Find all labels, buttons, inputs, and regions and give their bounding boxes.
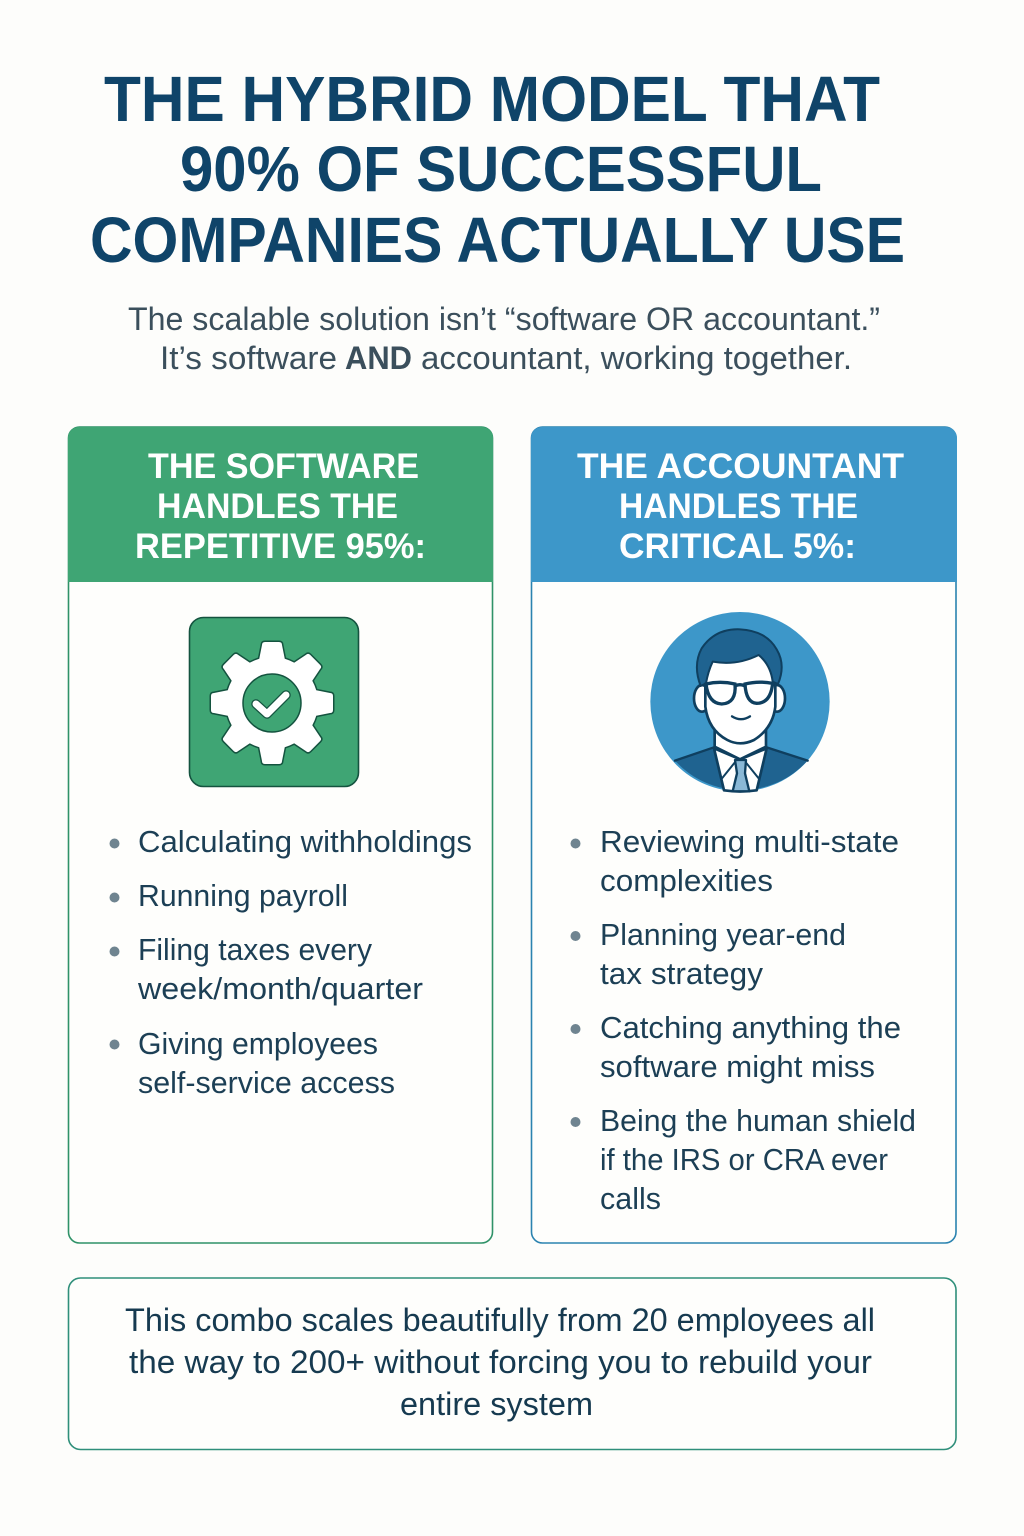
accountant bullet list: Being the human shield	[600, 1103, 916, 1138]
accountant bullet list: complexities	[600, 863, 773, 898]
accountant bullet list: tax strategy	[600, 956, 763, 991]
accountant header: HANDLES THE	[619, 487, 858, 526]
icon: gear with check mark	[190, 618, 358, 786]
title: COMPANIES ACTUALLY USE	[90, 204, 905, 276]
hair	[697, 629, 782, 686]
accountant bullet list: calls	[600, 1181, 661, 1216]
panel: software	[68, 427, 493, 1243]
software bullet list: Running payroll	[138, 878, 348, 913]
panel: accountant	[531, 427, 957, 1243]
software bullet list: Giving employees	[138, 1026, 378, 1061]
suit	[675, 747, 808, 790]
accountant bullet list: software might miss	[600, 1049, 875, 1084]
software header: REPETITIVE 95%:	[135, 527, 426, 566]
title: 90% OF SUCCESSFUL	[180, 133, 822, 205]
callout: scaling note: This combo scales beautifully from 20 employees all	[125, 1302, 875, 1338]
accountant bullet list	[570, 824, 916, 1216]
subtitle	[128, 301, 880, 376]
callout: scaling note	[68, 1278, 956, 1450]
glasses	[706, 682, 773, 704]
tie	[733, 760, 749, 791]
accountant bullet list: Planning year-end	[600, 917, 846, 952]
software bullet list: Filing taxes every	[138, 932, 372, 967]
accountant header: THE ACCOUNTANT	[577, 447, 904, 486]
callout: scaling note: entire system	[400, 1386, 593, 1422]
software header: THE SOFTWARE	[148, 447, 419, 486]
neck	[715, 728, 766, 759]
software bullet list: Calculating withholdings	[138, 824, 472, 859]
accountant bullet list: if the IRS or CRA ever	[600, 1142, 888, 1177]
subtitle: accountant, working together.	[421, 340, 852, 376]
suit shoulders	[675, 747, 808, 761]
software header	[68, 427, 493, 582]
accountant bullet list: Catching anything the	[600, 1010, 901, 1045]
smile	[732, 716, 750, 719]
ears	[694, 685, 710, 712]
accountant header: CRITICAL 5%:	[619, 527, 856, 566]
subtitle: It’s software	[160, 340, 337, 376]
software bullet list	[110, 824, 472, 1100]
software bullet list: week/month/quarter	[137, 971, 423, 1006]
shirt	[714, 748, 767, 791]
title: THE HYBRID MODEL THAT	[104, 63, 880, 135]
software header: HANDLES THE	[157, 487, 398, 526]
accountant bullet list: Reviewing multi-state	[600, 824, 899, 859]
title	[90, 63, 905, 276]
software bullet list: self-service access	[138, 1065, 395, 1100]
callout: scaling note: the way to 200+ without forcing you to rebuild your	[129, 1344, 872, 1380]
subtitle: The scalable solution isn’t “software OR accountant.”	[128, 301, 880, 337]
icon: accountant portrait	[650, 612, 830, 791]
collar lines	[722, 763, 759, 778]
accountant header	[531, 427, 957, 582]
face	[705, 653, 775, 743]
subtitle: AND	[345, 340, 412, 376]
